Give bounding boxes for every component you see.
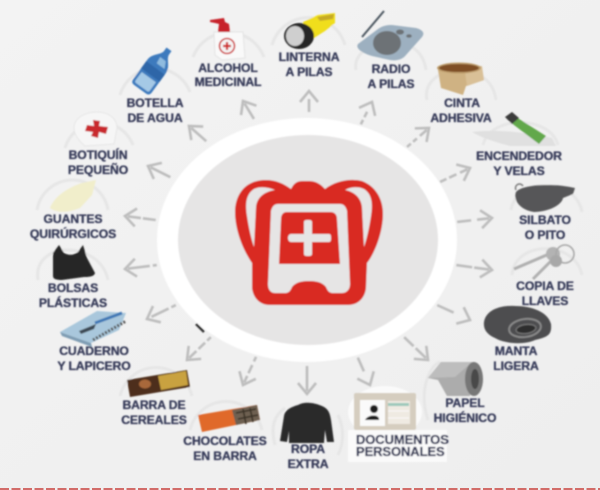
arrows bbox=[124, 91, 493, 394]
label: bolsas plasticas: PLÁSTICAS bbox=[39, 295, 107, 310]
white highlight: documentos bbox=[348, 386, 447, 462]
label: radio a pilas: A PILAS bbox=[368, 77, 414, 91]
icon: blanket bbox=[484, 306, 551, 343]
icon: lighter and candle bbox=[472, 112, 556, 146]
label: cuaderno y lapicero: CUADERNO bbox=[59, 344, 129, 358]
arrow: encendedor bbox=[436, 160, 474, 190]
label: alcohol medicinal: ALCOHOL bbox=[198, 61, 258, 75]
arrow: chocolates bbox=[235, 353, 264, 389]
label: bolsas plasticas: BOLSAS bbox=[48, 281, 98, 295]
label: chocolates en barra: EN BARRA bbox=[193, 449, 257, 463]
icon: chocolate bar bbox=[198, 405, 260, 432]
label: documentos personales: PERSONALES bbox=[356, 444, 445, 459]
label: copia de llaves: LLAVES bbox=[522, 294, 568, 308]
label: botiquin pequeno: PEQUEÑO bbox=[68, 162, 128, 177]
icon: plastic bag bbox=[53, 245, 95, 280]
label: copia de llaves: COPIA DE bbox=[516, 279, 574, 293]
icon: jacket bbox=[280, 403, 334, 443]
label: linterna a pilas: LINTERNA bbox=[279, 50, 339, 64]
icon: toilet paper bbox=[428, 362, 483, 396]
label: silbato o pito: SILBATO bbox=[519, 213, 571, 227]
icon: ID card bbox=[354, 393, 416, 430]
icon: whistle bbox=[515, 184, 575, 212]
arrow: papel bbox=[398, 331, 434, 366]
icon: water bottle bbox=[131, 43, 178, 96]
label: encendedor y velas: Y VELAS bbox=[493, 164, 545, 178]
label: linterna a pilas: A PILAS bbox=[286, 65, 332, 79]
dashed bottom border bbox=[0, 488, 600, 490]
icon: tape bbox=[437, 62, 484, 95]
label: guantes quirurgicos: QUIRÚRGICOS bbox=[30, 226, 116, 241]
icon: gloves bbox=[50, 180, 96, 212]
arrow: guantes bbox=[124, 207, 157, 229]
icon: radio bbox=[357, 11, 423, 60]
icon: notebook and pen bbox=[60, 311, 126, 347]
label: manta ligera: LIGERA bbox=[493, 359, 539, 373]
arrow: ropa bbox=[298, 366, 316, 394]
label: chocolates en barra: CHOCOLATES bbox=[183, 434, 267, 448]
label: barra de cereales: CEREALES bbox=[121, 413, 187, 427]
arrow: documentos bbox=[350, 354, 378, 389]
arrow: radio bbox=[353, 98, 380, 128]
arrow: copia bbox=[455, 256, 493, 279]
label: botella de agua: BOTELLA bbox=[127, 96, 183, 110]
label: papel higienico: PAPEL bbox=[445, 396, 485, 410]
arrow: barra bbox=[181, 331, 217, 366]
label: alcohol medicinal: MEDICINAL bbox=[195, 75, 262, 89]
arrow: manta bbox=[433, 297, 474, 328]
label: silbato o pito: O PITO bbox=[525, 228, 565, 242]
labels bbox=[30, 50, 574, 471]
label: botiquin pequeno: BOTIQUÍN bbox=[69, 148, 127, 162]
icon: cereal bar bbox=[127, 370, 190, 397]
icon: flashlight bbox=[284, 13, 335, 49]
label: encendedor y velas: ENCENDEDOR bbox=[476, 149, 562, 163]
label: manta ligera: MANTA bbox=[495, 344, 537, 358]
label: cuaderno y lapicero: Y LAPICERO bbox=[57, 359, 131, 373]
label: radio a pilas: RADIO bbox=[372, 62, 410, 76]
mark near ring bbox=[196, 324, 204, 332]
arrow: botiquin bbox=[144, 158, 174, 185]
arrow: linterna bbox=[300, 91, 318, 112]
icon: first aid kit bbox=[74, 112, 117, 146]
arrow: cuaderno bbox=[143, 297, 180, 327]
central circle bbox=[157, 118, 457, 362]
label: guantes quirurgicos: GUANTES bbox=[44, 212, 102, 226]
arrow: cinta bbox=[401, 121, 435, 154]
label: cinta adhesiva: CINTA bbox=[444, 96, 480, 110]
icon: sanitizer pump bbox=[210, 18, 245, 60]
arrow: alcohol bbox=[235, 96, 262, 124]
icon: keys bbox=[514, 245, 574, 279]
label: cinta adhesiva: ADHESIVA bbox=[430, 111, 492, 125]
label: papel higienico: HIGIÉNICO bbox=[434, 410, 496, 425]
arrow: bolsas bbox=[124, 256, 158, 278]
label: barra de cereales: BARRA DE bbox=[122, 398, 186, 412]
arrow: botella bbox=[183, 119, 212, 148]
label: ropa extra: ROPA bbox=[291, 442, 325, 456]
arrow: silbato bbox=[456, 209, 493, 231]
icon: first aid backpack bbox=[235, 180, 383, 305]
label: botella de agua: DE AGUA bbox=[127, 111, 183, 125]
label: ropa extra: EXTRA bbox=[288, 457, 329, 471]
label: documentos personales: DOCUMENTOS bbox=[356, 432, 449, 447]
